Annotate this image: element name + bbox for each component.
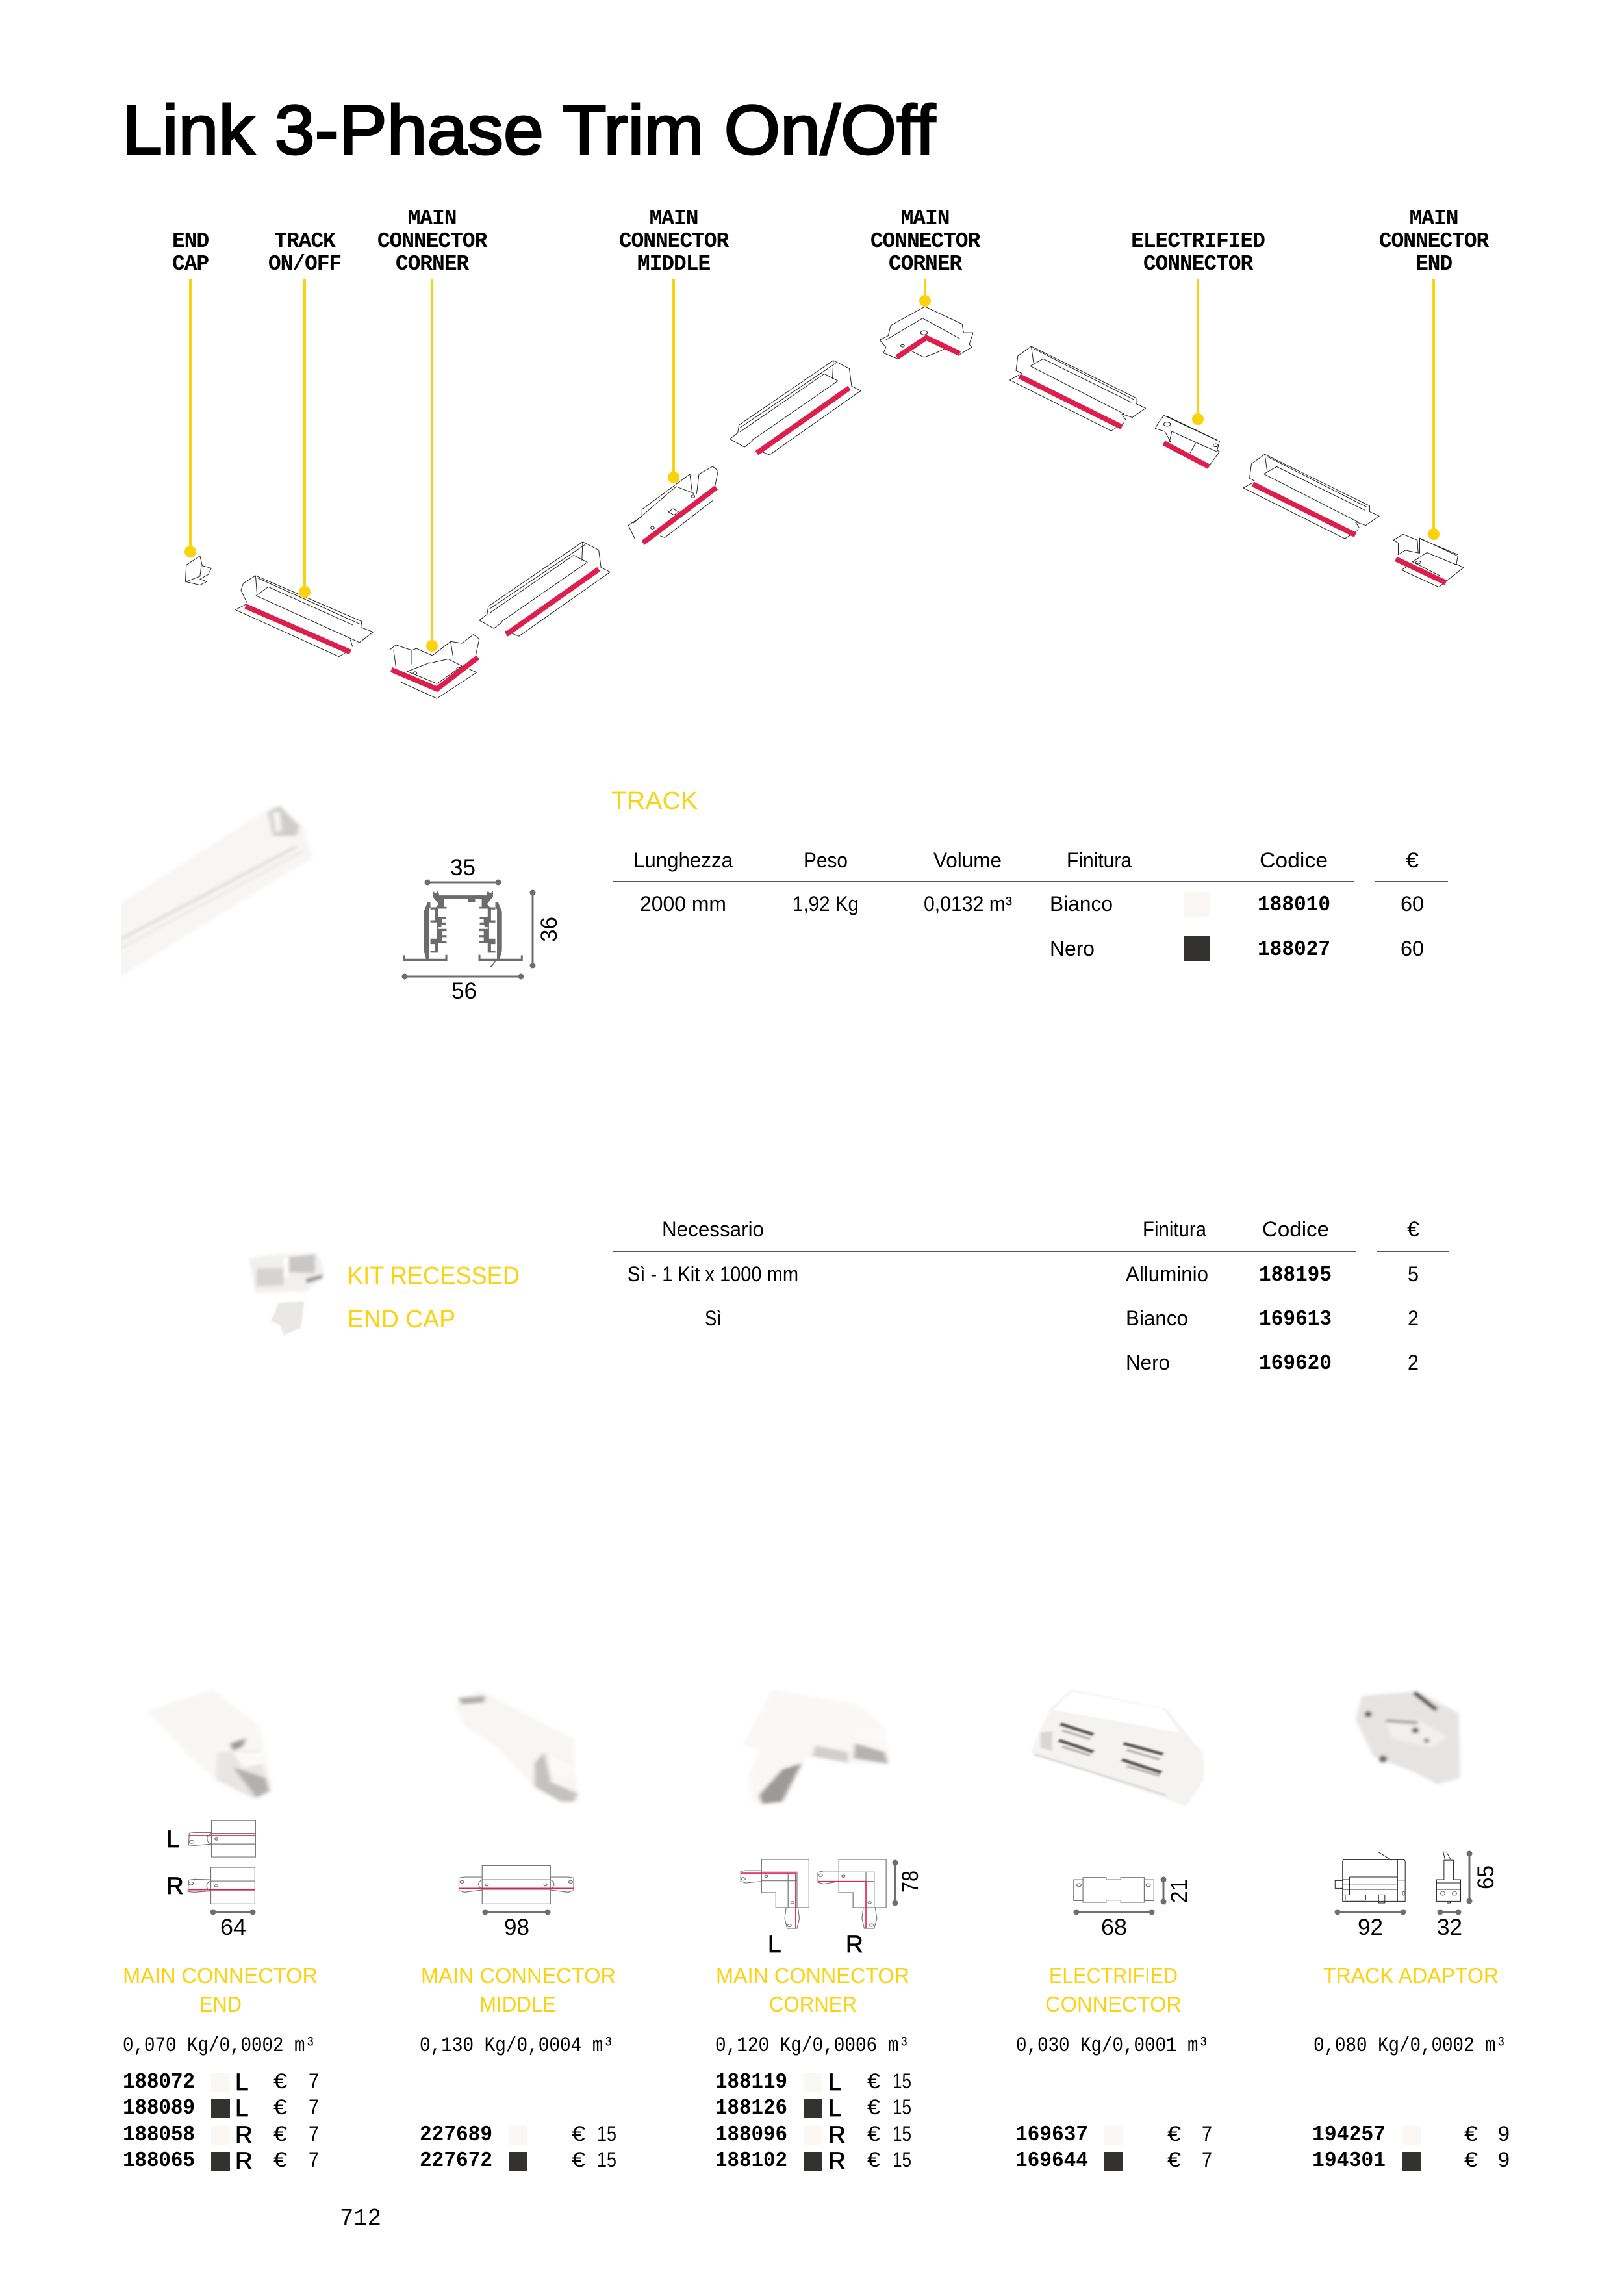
table header: Codice xyxy=(1262,1218,1329,1241)
price list: L xyxy=(235,2095,249,2121)
dimension: 32: 32 xyxy=(1437,1915,1462,1940)
label: main connector corner: CORNER xyxy=(396,252,469,276)
dimension: 92: 92 xyxy=(1358,1915,1383,1940)
right group of line drawings xyxy=(880,307,1464,587)
price list: € xyxy=(1464,2122,1478,2145)
icon: main connector corner top drawing xyxy=(880,307,973,359)
table header: € xyxy=(1406,849,1419,872)
table row: nero: Nero xyxy=(1126,1351,1170,1374)
photo: main connector end xyxy=(147,1689,273,1800)
price list: 188096 xyxy=(715,2123,787,2147)
table row: bianco: Bianco xyxy=(1050,892,1113,915)
price list: 188065 xyxy=(123,2149,195,2173)
heading xyxy=(1045,1963,1182,2016)
icon: track segment 3 xyxy=(730,361,861,455)
table: track xyxy=(613,849,1448,962)
price list xyxy=(715,2069,911,2174)
table row: bianco xyxy=(705,1307,1419,1331)
price list: € xyxy=(1464,2148,1478,2171)
table row: nero: 60 xyxy=(1401,937,1424,960)
price list: 188058 xyxy=(123,2123,195,2147)
track system diagram xyxy=(172,207,1489,698)
table header: Necessario xyxy=(662,1218,764,1241)
table header: Finitura xyxy=(1143,1218,1206,1241)
price list: 188102 xyxy=(715,2149,787,2173)
price list: 9 xyxy=(1498,2148,1510,2171)
dimension: 92 xyxy=(1334,1909,1406,1940)
table header: Codice xyxy=(1260,849,1328,872)
heading: MAIN CONNECTOR xyxy=(421,1963,616,1987)
panel: electrified connector xyxy=(1015,1689,1212,2173)
table row: nero xyxy=(1050,936,1424,962)
price list: 9 xyxy=(1498,2122,1510,2145)
photo: main connector corner xyxy=(742,1689,890,1804)
heading: END xyxy=(199,1992,242,2016)
table row: nero: Nero xyxy=(1050,937,1095,960)
price list: 188089 xyxy=(123,2096,195,2120)
label: R: R xyxy=(846,1931,863,1958)
table header: Volume xyxy=(933,849,1002,872)
price list: € xyxy=(867,2069,880,2093)
price list: 7 xyxy=(1202,2122,1212,2145)
label: main connector corner top: CORNER xyxy=(889,252,962,276)
callout: track pointer xyxy=(299,279,311,598)
heading: MAIN CONNECTOR xyxy=(123,1963,318,1987)
table header: € xyxy=(1407,1218,1419,1241)
table header: Lunghezza xyxy=(633,849,733,872)
label: main connector end: CONNECTOR xyxy=(1379,229,1489,253)
table row: nero: 169620 xyxy=(1259,1351,1332,1375)
heading: CONNECTOR xyxy=(1045,1992,1182,2016)
dimension: 56 xyxy=(401,973,524,1004)
dimension: 78 xyxy=(893,1859,923,1906)
icon: track segment 2 xyxy=(479,542,610,636)
dimension: 64: 64 xyxy=(220,1915,246,1940)
dimension: 68 xyxy=(1073,1909,1155,1940)
callout: corner pointer xyxy=(426,279,438,652)
table row: nero: 188027 xyxy=(1258,938,1330,962)
dimension: 65: 65 xyxy=(1473,1865,1499,1889)
photo: track product xyxy=(121,805,310,975)
dimension: 64 xyxy=(210,1909,256,1940)
price list: 15 xyxy=(597,2122,616,2145)
price list: 7 xyxy=(309,2095,319,2119)
table row: bianco: Bianco xyxy=(1126,1307,1188,1330)
photo: kit recessed xyxy=(249,1254,325,1293)
callout: end cap pointer xyxy=(184,279,196,557)
table header xyxy=(613,1218,1449,1252)
callout: electrified pointer xyxy=(1192,279,1204,425)
price list: 15 xyxy=(893,2148,911,2171)
table header: Peso xyxy=(804,849,848,872)
dimension: 35: 35 xyxy=(450,855,476,880)
label: main connector corner: CONNECTOR xyxy=(377,229,487,253)
heading: TRACK ADAPTOR xyxy=(1323,1963,1499,1987)
label: track on/off: TRACK xyxy=(274,229,336,253)
label: kit recessed: KIT RECESSED xyxy=(348,1262,520,1290)
price list: 188126 xyxy=(715,2096,787,2120)
icon: track segment 1 xyxy=(236,576,373,657)
photo: track adaptor xyxy=(1356,1691,1460,1785)
price list: € xyxy=(572,2148,585,2171)
price list: 15 xyxy=(893,2122,911,2145)
callout: middle pointer xyxy=(668,279,679,483)
price list: 7 xyxy=(309,2069,319,2093)
price list: € xyxy=(1167,2148,1181,2171)
label: main connector corner: MAIN xyxy=(408,207,456,231)
label: end cap: END CAP xyxy=(348,1306,455,1333)
price list: 194257 xyxy=(1312,2123,1386,2147)
price list: L xyxy=(235,2069,249,2095)
label: main connector corner top: CONNECTOR xyxy=(870,229,980,253)
label: main connector end: MAIN xyxy=(1410,207,1458,231)
table row: bianco: 188010 xyxy=(1258,893,1330,917)
label: track on/off: ON/OFF xyxy=(268,252,341,276)
panel: track xyxy=(107,787,1448,1004)
dimension: 56: 56 xyxy=(451,978,477,1004)
table header: Finitura xyxy=(1067,849,1132,872)
price list xyxy=(1015,2122,1212,2173)
heading: ELECTRIFIED xyxy=(1049,1963,1178,1987)
drawing: adaptor side view xyxy=(1335,1852,1405,1903)
panel: main connector middle xyxy=(420,1689,616,2173)
price list: € xyxy=(1167,2122,1181,2145)
price list: 194301 xyxy=(1312,2149,1386,2173)
photo: electrified connector xyxy=(1030,1689,1204,1806)
heading xyxy=(123,1963,318,2016)
panel: track adaptor xyxy=(1312,1691,1510,2173)
drawing: corner R xyxy=(818,1859,886,1928)
price list xyxy=(420,2122,616,2173)
price list: 188072 xyxy=(123,2070,195,2094)
price list: 188119 xyxy=(715,2070,787,2094)
table row: bianco: 0,0132 m³ xyxy=(924,892,1012,915)
label: L: L xyxy=(768,1931,781,1958)
price list: R xyxy=(828,2147,846,2174)
price list: € xyxy=(572,2122,585,2145)
price list: € xyxy=(867,2095,880,2119)
drawing: adaptor end view xyxy=(1436,1852,1461,1903)
heading: CORNER xyxy=(769,1992,857,2016)
price list: 15 xyxy=(597,2148,616,2171)
heading: MIDDLE xyxy=(479,1992,556,2016)
price list xyxy=(123,2069,319,2174)
label: electrified connector: ELECTRIFIED xyxy=(1131,229,1265,253)
label: main connector middle: MAIN xyxy=(650,207,698,231)
price list: € xyxy=(867,2122,880,2145)
icon: track segment 4 xyxy=(1009,346,1146,431)
dimension: 36: 36 xyxy=(537,917,562,942)
table row: bianco: 2 xyxy=(1408,1307,1419,1330)
weight and volume: 0,030 Kg/0,0001 m³ xyxy=(1016,2034,1209,2058)
price list xyxy=(1312,2122,1510,2173)
label: electrified connector: CONNECTOR xyxy=(1143,252,1253,276)
page number: 712 xyxy=(340,2205,381,2232)
table row: bianco: 60 xyxy=(1401,892,1424,915)
dimension: 98 xyxy=(482,1909,551,1940)
price list: € xyxy=(273,2095,287,2119)
price list: 227689 xyxy=(420,2123,492,2147)
table row: alluminio xyxy=(628,1262,1419,1287)
heading: track: TRACK xyxy=(611,787,698,815)
dimension: 78: 78 xyxy=(898,1871,923,1893)
weight and volume: 0,130 Kg/0,0004 m³ xyxy=(420,2034,614,2058)
price list: 7 xyxy=(309,2122,319,2145)
table row: alluminio: 5 xyxy=(1408,1262,1419,1286)
callout: corner top pointer xyxy=(919,279,931,307)
table row: alluminio: Alluminio xyxy=(1126,1262,1208,1286)
table row: bianco: 1,92 Kg xyxy=(793,892,859,915)
dimension: 35 xyxy=(425,855,501,885)
label: main connector corner top: MAIN xyxy=(901,207,949,231)
left group of line drawings xyxy=(185,361,861,698)
price list: 7 xyxy=(309,2148,319,2171)
label: L: L xyxy=(166,1826,180,1852)
price list: 15 xyxy=(893,2069,911,2093)
dimension: 36 xyxy=(530,890,562,968)
label: main connector middle: MIDDLE xyxy=(637,252,710,276)
drawing: electrified connector xyxy=(1074,1878,1154,1902)
table row: nero xyxy=(1126,1351,1419,1375)
weight and volume: 0,080 Kg/0,0002 m³ xyxy=(1313,2034,1506,2058)
panel: main connector corner xyxy=(715,1689,923,2174)
panel: main connector end xyxy=(123,1689,319,2174)
heading xyxy=(421,1963,616,2016)
drawing: corner L xyxy=(741,1859,809,1928)
dimension: 68: 68 xyxy=(1101,1915,1127,1940)
title: Link 3-Phase Trim On/Off xyxy=(122,90,936,169)
icon: profile section xyxy=(403,891,523,967)
photo: end cap xyxy=(271,1301,304,1335)
label: main connector end: END xyxy=(1415,252,1452,276)
icon: main connector middle drawing xyxy=(628,466,718,543)
price list: € xyxy=(273,2069,287,2093)
icon: electrified connector drawing xyxy=(1155,415,1219,466)
price list: 7 xyxy=(1202,2148,1212,2171)
dimension: 65 xyxy=(1467,1850,1499,1904)
photo: main connector middle xyxy=(455,1689,579,1804)
drawing: connector middle xyxy=(459,1865,574,1904)
icon: track segment 5 xyxy=(1243,454,1379,539)
chart: track cross-section with dimensions xyxy=(401,855,562,1004)
label: R: R xyxy=(166,1872,184,1899)
table row: alluminio: Sì - 1 Kit x 1000 mm xyxy=(628,1262,798,1286)
price list: L xyxy=(828,2069,842,2095)
price list: € xyxy=(273,2148,287,2171)
price list: 227672 xyxy=(420,2149,492,2173)
table row: bianco: 2000 mm xyxy=(640,892,726,915)
dimension: 98: 98 xyxy=(504,1915,529,1940)
label: main connector middle: CONNECTOR xyxy=(619,229,729,253)
icon: main connector end drawing xyxy=(1393,534,1464,587)
table row: alluminio: 188195 xyxy=(1259,1263,1332,1287)
table: accessories xyxy=(613,1218,1449,1375)
table row: nero: 2 xyxy=(1408,1351,1419,1374)
price list: R xyxy=(235,2147,253,2174)
price list: R xyxy=(235,2121,253,2148)
table row: bianco: 169613 xyxy=(1259,1307,1332,1331)
drawing: connector L xyxy=(188,1820,255,1857)
table row: bianco: Sì xyxy=(705,1307,722,1330)
callout: main end pointer xyxy=(1428,279,1440,540)
label: end cap: CAP xyxy=(172,252,209,276)
label: end cap: END xyxy=(172,229,209,253)
weight and volume: 0,070 Kg/0,0002 m³ xyxy=(123,2034,316,2058)
drawing: connector R xyxy=(188,1867,255,1904)
icon: end cap drawing xyxy=(185,556,211,585)
weight and volume: 0,120 Kg/0,0006 m³ xyxy=(715,2034,909,2058)
price list: R xyxy=(828,2121,846,2148)
dimension: 21: 21 xyxy=(1167,1879,1192,1903)
table header xyxy=(613,849,1448,882)
icon: main connector corner drawing xyxy=(389,634,479,698)
panel: accessories xyxy=(249,1218,1449,1375)
heading: MAIN CONNECTOR xyxy=(716,1963,909,1987)
price list: 169637 xyxy=(1015,2123,1088,2147)
price list: € xyxy=(273,2122,287,2145)
heading xyxy=(716,1963,909,2016)
price list: € xyxy=(867,2148,880,2171)
price list: 15 xyxy=(893,2095,911,2119)
price list: 169644 xyxy=(1015,2149,1088,2173)
price list: L xyxy=(828,2095,842,2121)
table row: bianco xyxy=(640,892,1424,917)
